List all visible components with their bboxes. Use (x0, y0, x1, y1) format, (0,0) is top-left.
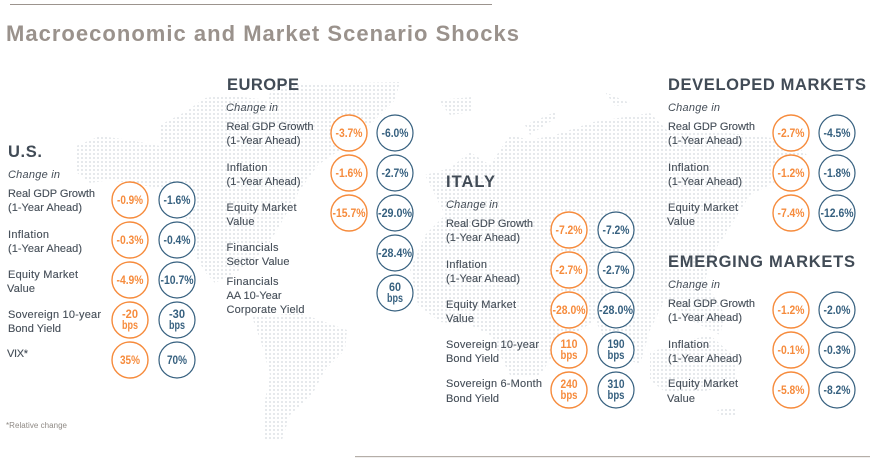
row: Inflation: -0.1% (778, 345, 804, 357)
row: Equity Market Value: -7.4% (778, 208, 804, 220)
row: Sovereign 6-Month Bond Yield: bps (608, 390, 624, 402)
row: Equity Market Value: Value (446, 313, 474, 325)
row: Sovereign 6-Month Bond Yield: Sovereign 6-Month (446, 378, 542, 390)
row: Inflation: -0.3% (824, 345, 850, 357)
row: VIX: VIX* (7, 348, 29, 360)
row: Equity Market Value: -5.8% (778, 385, 804, 397)
row: Equity Market Value: Value (667, 216, 695, 228)
row: Inflation (446, 252, 634, 288)
row: Real GDP Growth: -7.2% (556, 225, 582, 237)
panel: Italy (446, 173, 634, 408)
row: Sovereign 10-year Bond Yield: Sovereign 10-year (8, 309, 101, 321)
row: Real GDP Growth (226, 115, 413, 151)
row: Real GDP Growth: -3.7% (336, 128, 362, 140)
row: Sovereign 10-year Bond Yield: bps (169, 320, 185, 332)
row: Financials AA 10-Year Corporate Yield: AA 10-Year (226, 290, 282, 302)
row: Real GDP Growth: -4.5% (824, 128, 850, 140)
row: Sovereign 6-Month Bond Yield: bps (560, 390, 578, 402)
row: Inflation: Inflation (668, 162, 709, 174)
row: Equity Market Value: -8.2% (824, 385, 850, 397)
panel: Emerging Markets (667, 253, 855, 408)
row: Sovereign 10-year Bond Yield (446, 332, 634, 368)
row: Real GDP Growth: Real GDP Growth (668, 298, 755, 310)
row: Inflation: Inflation (226, 162, 268, 174)
row: Real GDP Growth (668, 292, 855, 328)
row: Equity Market Value: Value (667, 393, 695, 405)
row: Inflation: (1-Year Ahead) (446, 273, 520, 285)
row: Sovereign 6-Month Bond Yield (446, 372, 634, 408)
row: Equity Market Value: Equity Market (8, 269, 78, 281)
row: Sovereign 10-year Bond Yield: bps (560, 350, 578, 362)
row: Real GDP Growth (8, 182, 195, 218)
row: Inflation: (1-Year Ahead) (668, 353, 742, 365)
footnote: *Relative change (6, 421, 68, 430)
row: Sovereign 10-year Bond Yield: Sovereign 10-year (446, 339, 539, 351)
row: Real GDP Growth: Real GDP Growth (226, 121, 314, 133)
row: Real GDP Growth: -6.0% (382, 128, 408, 140)
row: Inflation: Inflation (668, 339, 709, 351)
row: Real GDP Growth: (1-Year Ahead) (8, 202, 82, 214)
row: Real GDP Growth: (1-Year Ahead) (668, 135, 742, 147)
row: Sovereign 10-year Bond Yield: bps (122, 320, 138, 332)
row: Sovereign 10-year Bond Yield: 110 (560, 339, 578, 351)
row: Financials Sector Value (226, 235, 413, 271)
row: Equity Market Value: Equity Market (446, 299, 516, 311)
row: Inflation: -1.8% (824, 168, 850, 180)
row: Equity Market Value: -15.7% (332, 208, 366, 220)
row: Equity Market Value (226, 195, 413, 231)
row: Real GDP Growth: (1-Year Ahead) (668, 312, 742, 324)
dotted world map (76, 82, 807, 440)
row: VIX (7, 342, 195, 378)
row: Equity Market Value: -4.9% (116, 275, 144, 287)
heading: U.S.: U.S. (8, 143, 42, 161)
row: Financials Sector Value: Financials (226, 242, 279, 254)
row: Real GDP Growth: Real GDP Growth (668, 121, 755, 133)
subheading: Change in: Change in (668, 102, 720, 114)
row: Financials AA 10-Year Corporate Yield: Corporate Yield (226, 304, 304, 316)
row: Inflation: (1-Year Ahead) (226, 176, 300, 188)
row: Sovereign 10-year Bond Yield: 190 (608, 339, 624, 351)
row: Equity Market Value: Equity Market (668, 378, 738, 390)
row: Equity Market Value: Value (7, 283, 35, 295)
row: Financials Sector Value: -28.4% (378, 248, 412, 260)
row: Equity Market Value: -29.0% (378, 208, 412, 220)
row: Sovereign 6-Month Bond Yield: Bond Yield (446, 393, 499, 405)
row: Sovereign 6-Month Bond Yield: 240 (560, 379, 578, 391)
row: Equity Market Value: -12.6% (820, 208, 854, 220)
row: Sovereign 10-year Bond Yield: -20 (122, 309, 138, 321)
row: Financials AA 10-Year Corporate Yield: 60 (389, 282, 401, 294)
title: Macroeconomic and Market Scenario Shocks (6, 21, 519, 46)
row: VIX: 35% (120, 355, 140, 367)
row: Inflation: -2.7% (556, 265, 582, 277)
row: Real GDP Growth: Real GDP Growth (446, 218, 533, 230)
row: Financials AA 10-Year Corporate Yield: bps (387, 293, 403, 305)
row: Inflation: -2.7% (602, 265, 630, 277)
heading: Developed Markets: DEVELOPED MARKETS (668, 76, 866, 94)
row: Real GDP Growth: Real GDP Growth (8, 188, 95, 200)
panel: U.S. (7, 143, 195, 378)
row: Equity Market Value: -10.7% (160, 275, 194, 287)
row: Financials Sector Value: Sector Value (226, 256, 290, 268)
row: Real GDP Growth: (1-Year Ahead) (226, 135, 300, 147)
row: Equity Market Value (446, 292, 634, 328)
row: Inflation (668, 332, 855, 368)
row: Inflation: Inflation (446, 259, 487, 271)
row: Sovereign 10-year Bond Yield (8, 302, 195, 338)
subheading: Change in: Change in (668, 279, 720, 291)
row: Real GDP Growth: -7.2% (602, 225, 630, 237)
row: Inflation: -0.4% (164, 235, 190, 247)
row: Financials AA 10-Year Corporate Yield: Financials (226, 276, 279, 288)
row: Equity Market Value (7, 262, 195, 298)
row: Inflation: Inflation (8, 229, 49, 241)
row: Sovereign 10-year Bond Yield: Bond Yield (8, 323, 61, 335)
row: Inflation: (1-Year Ahead) (668, 176, 742, 188)
row: Equity Market Value: Equity Market (226, 202, 296, 214)
row: Sovereign 10-year Bond Yield: -30 (169, 309, 185, 321)
row: Inflation (226, 155, 413, 191)
row: Real GDP Growth: (1-Year Ahead) (446, 232, 520, 244)
row: Real GDP Growth (668, 115, 855, 151)
bottom rule (355, 456, 870, 457)
row: Equity Market Value (667, 372, 855, 408)
row: Real GDP Growth: -0.9% (117, 195, 143, 207)
panel: Developed Markets (667, 76, 866, 231)
heading: Italy: ITALY (446, 173, 495, 191)
panel: Europe (226, 76, 413, 316)
row: Real GDP Growth (446, 212, 634, 248)
subheading: Change in: Change in (226, 102, 278, 114)
subheading: Change in: Change in (446, 199, 498, 211)
row: Inflation (668, 155, 855, 191)
row: Sovereign 10-year Bond Yield: bps (608, 350, 624, 362)
row: Real GDP Growth: -2.7% (778, 128, 804, 140)
row: Real GDP Growth: -2.0% (824, 305, 850, 317)
row: Equity Market Value: -28.0% (599, 305, 633, 317)
row: Real GDP Growth: -1.6% (164, 195, 190, 207)
row: Equity Market Value: -28.0% (552, 305, 586, 317)
top rule (10, 4, 492, 5)
row: Equity Market Value (667, 195, 855, 231)
row: Inflation: (1-Year Ahead) (8, 243, 82, 255)
row: Sovereign 10-year Bond Yield: Bond Yield (446, 353, 499, 365)
row: Inflation: -0.3% (116, 235, 144, 247)
row: Equity Market Value: Value (226, 216, 254, 228)
row: Sovereign 6-Month Bond Yield: 310 (608, 379, 624, 391)
row: VIX: 70% (167, 355, 187, 367)
row: Equity Market Value: Equity Market (668, 202, 738, 214)
row: Financials AA 10-Year Corporate Yield (226, 275, 413, 316)
row: Real GDP Growth: -1.2% (778, 305, 804, 317)
row: Inflation: -2.7% (382, 168, 408, 180)
heading: Europe: EUROPE (227, 76, 299, 94)
row: Inflation: -1.2% (778, 168, 804, 180)
heading: Emerging Markets: EMERGING MARKETS (668, 253, 855, 271)
row: Inflation (8, 222, 195, 258)
row: Inflation: -1.6% (336, 168, 362, 180)
subheading: Change in: Change in (8, 169, 60, 181)
